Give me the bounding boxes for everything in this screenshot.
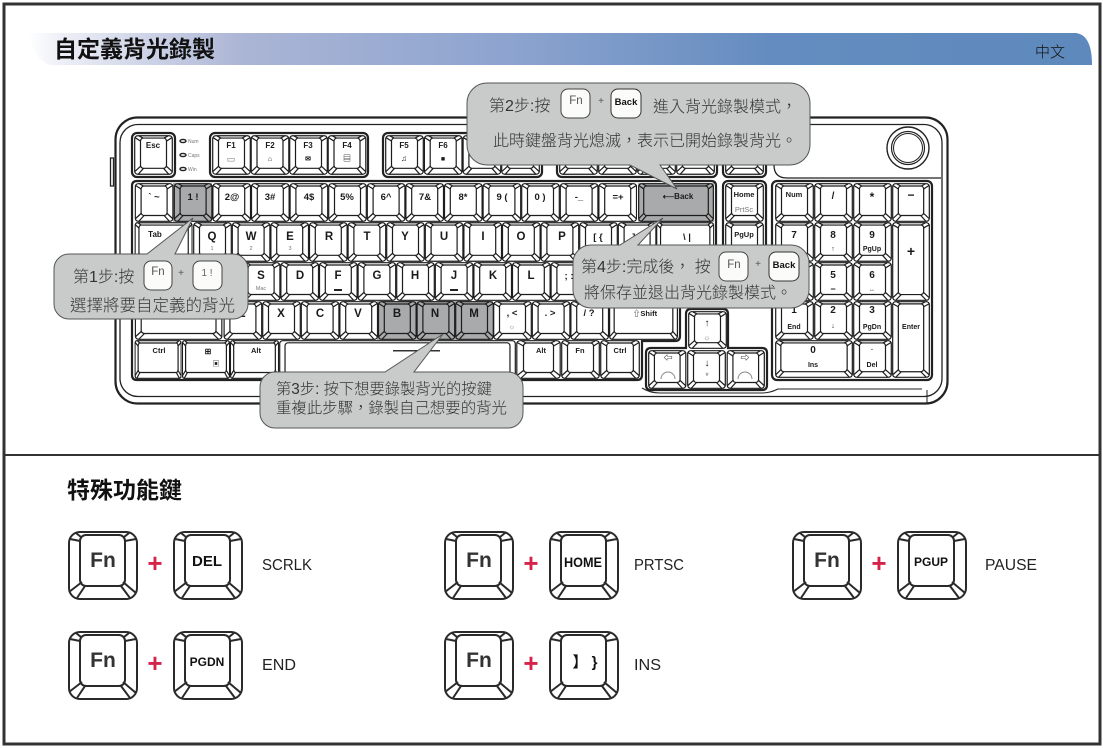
shortcut: Fn + HOME = PRTSC: PRTSC [634,557,684,574]
key group outlines [132,133,932,390]
shortcut: Fn + PGUP = PAUSE: PGUP [914,555,948,569]
keycap: Fn [561,89,590,118]
key legends: F1 [226,141,236,150]
callout: step 4: + [755,259,761,270]
key legends: ♫ [401,154,407,163]
letter legends: ▣ [212,360,220,368]
navigation keys [726,184,763,300]
navigation and arrow legends: * [705,371,709,381]
shortcut: Fn + PGDN = END: + [147,648,163,678]
letter legends: ⊞ [205,347,212,356]
keycap: Fn: Fn [569,95,583,107]
shortcut: Fn + DEL = SCRLK: Fn [90,549,116,572]
numeric keypad legends: 9 [869,230,875,241]
title: 自定義背光錄製 [54,36,215,62]
callout: step 3 [260,334,523,428]
numeric keypad legends: PgUp [863,246,881,253]
callout: step 1: + [178,268,184,279]
key legends [146,141,757,165]
letter legends: S [257,270,265,282]
shortcut: Fn + HOME = PRTSC: Fn [466,549,492,572]
shortcut: Fn + HOME = PRTSC: + [523,548,539,578]
number row legends: 8* [459,192,468,203]
navigation and arrow legends: ☼ [704,333,710,342]
number row legends: -_ [575,192,584,203]
keycap: Back [769,252,799,281]
callout: step 2: + [598,96,604,107]
numeric keypad legends: − [907,188,915,202]
number row legends: 2@ [225,192,239,203]
keycap: Fn: Fn [151,266,165,278]
shortcut: Fn + PGDN = END [69,632,296,699]
letter legends: Tab [148,230,162,239]
home row keys [135,263,713,300]
language label: 中文 [1035,44,1065,61]
arrow keys [649,312,764,388]
QWERTY row keys [135,223,714,261]
knob [887,127,929,169]
keycap: Back: Back [773,260,796,271]
letter legends [148,230,691,368]
letter legends: F [334,270,342,282]
keycap: Back [611,89,641,118]
letter legends: ; : [565,271,573,282]
shortcut: Fn + PGUP = PAUSE: PAUSE [985,557,1037,574]
letter legends: 2 [249,246,253,252]
letter legends: N [431,308,439,320]
shortcut: Fn + DEL = SCRLK: SCRLK [262,557,312,574]
key legends: ◀+ [690,156,700,163]
letter legends: R [325,231,334,243]
letter legends: Ctrl [153,346,165,355]
letter legends: G [373,270,382,282]
number row legends: ` ~ [148,192,160,203]
key legends: ◀◀ [477,156,489,163]
callout: step 3: 重複此步驟，錄製自己想要的背光 [276,399,507,417]
key legends: F6 [438,141,448,150]
key legends: F4 [342,141,352,150]
letter legends: Ctrl [614,346,626,355]
key legends: ▤ [343,154,351,163]
numeric keypad legends: Del [867,362,877,369]
callout: step 2: 此時鍵盤背光熄滅，表示已開始錄製背光。 [493,132,797,150]
letter legends: K [489,270,498,282]
letter legends: C [316,308,324,320]
number row legends: 4$ [304,192,315,203]
letter legends: , < [507,308,518,319]
key legends: F3 [303,141,313,150]
numeric keypad legends: ↔ [869,287,875,293]
status LEDs: Caps [188,153,200,159]
callout: step 4: 第4步:完成後， 按 [581,258,711,276]
key legends: ▶▶ [574,156,586,163]
highlighted key shading [173,183,714,340]
divider [4,454,1100,456]
key legends: ▭ [227,154,235,164]
shortcut: Fn + PGDN = END: PGDN [190,655,224,669]
keyboard case [110,118,948,404]
shortcut: Fn + PGUP = PAUSE: Fn [814,549,840,572]
number row legends: 1 ! [187,192,199,203]
number row legends: =+ [612,192,624,203]
shortcut: Fn + 】} = INS [445,632,661,699]
keycap: 1 [193,261,222,290]
key legends: F5 [399,141,409,150]
key legends: ⌂ [268,156,272,163]
letter legends: X [277,308,285,320]
function row keys [135,136,763,174]
navigation and arrow legends: ⇦ [663,353,673,363]
number row legends: 7& [419,192,431,203]
keycap: 1: 1 ! [201,268,213,279]
numeric keypad legends: Num [786,190,803,199]
shortcut: Fn + PGDN = END: Fn [90,649,116,672]
numeric keypad legends: Enter [902,324,920,331]
letter legends: 3 [288,246,292,252]
keycap: Fn [144,261,172,290]
letter legends: E [286,231,294,243]
navigation and arrow legends: ⇨ [740,353,750,363]
letter legends: ⇧Shift [633,308,658,318]
key legends: Esc [146,141,161,150]
numeric keypad keys [776,184,929,378]
shortcut: Fn + 】} = INS: Fn [466,649,492,672]
key legends: F2 [265,141,275,150]
letter legends: B [393,308,401,320]
status LEDs [180,139,200,173]
number row legends [148,192,694,203]
callout: step 1 [54,218,248,319]
letter legends: Alt [251,346,262,355]
letter legends: ] } [632,232,642,243]
keyboard illustration [110,118,948,404]
keycap: Fn: Fn [727,259,741,271]
callout: step 2: 進入背光錄製模式， [653,98,797,116]
navigation and arrow legends: ↑ [704,318,710,329]
letter legends: U [440,231,448,243]
key legends: ■ [441,156,445,163]
numeric keypad legends: 1 [791,305,797,316]
letter legends: L [527,270,535,282]
letter legends: P [558,231,566,243]
header banner [28,33,1092,65]
shortcut: Fn + PGDN = END: END [262,657,296,674]
numeric keypad legends [786,188,920,369]
navigation and arrow legends: PgUp [734,230,754,239]
key legends: ✉ [305,156,311,163]
numeric keypad legends: 2 [830,305,836,316]
number row legends: 5% [340,192,354,203]
numeric keypad legends: ↑ [831,246,835,253]
callout: step 1: 第1步:按 [73,268,134,286]
numeric keypad legends: Ins [808,362,818,369]
callout: step 4: 將保存並退出背光錄製模式。 [584,284,792,302]
number row legends: 6^ [381,192,392,203]
shortcut: Fn + HOME = PRTSC: HOME [564,554,602,570]
letter legends: . > [545,308,556,319]
number row legends: ⟵Back [663,192,694,201]
numeric keypad legends: 7 [791,230,797,241]
letter legends: 1 [210,246,214,252]
navigation and arrow legends [661,190,754,381]
shortcut: Fn + PGUP = PAUSE: + [871,548,887,578]
numeric keypad legends: 8 [830,230,836,241]
letter legends: / ? [583,308,595,319]
number row legends: 9 ( [496,192,508,203]
numeric keypad legends: 5 [830,270,836,281]
shortcut: Fn + 】} = INS: INS [634,657,661,674]
keycap: Fn [719,252,748,281]
letter legends: \ | [683,232,691,243]
shortcut: Fn + HOME = PRTSC [445,532,684,599]
letter legends: Y [401,231,409,243]
numeric keypad legends: − [830,284,836,294]
letter legends: D [296,270,304,282]
letter legends: Fn [575,346,585,355]
shortcut: Fn + 】} = INS: + [523,648,539,678]
numeric keypad legends: 0 [810,345,816,356]
letter legends: J [451,270,457,282]
bottom row keys [135,341,639,378]
letter legends: Q [208,231,217,243]
shortcut: Fn + 】} = INS: 】 } [572,654,598,671]
callout: step 2 [467,83,810,189]
letter legends: Mac [256,286,266,292]
callout: step 2: 第2步:按 [489,97,550,115]
navigation and arrow legends: ↓ [704,358,710,369]
numeric keypad legends: 6 [869,270,875,281]
shortcut: Fn + DEL = SCRLK: DEL [192,553,222,570]
letter legends: I [481,231,485,243]
numeric keypad legends: 3 [869,305,875,316]
numeric keypad legends: + [907,243,915,259]
letter legends: W [246,231,257,243]
letter legends: T [363,231,371,243]
shortcut: Fn + DEL = SCRLK [69,532,312,599]
callout: step 1: 選擇將要自定義的背光 [70,296,235,315]
shift row keys [135,302,677,340]
status LEDs: Num [188,139,199,145]
navigation and arrow legends: PrtSc [735,205,753,214]
letter legends: Z [238,308,246,320]
numeric keypad legends: * [870,190,875,204]
letter legends: H [411,270,419,282]
key legends: ◀ [615,156,621,163]
letter legends: Alt [536,346,546,355]
number row legends: 3# [265,192,276,203]
letter legends: ☼ [509,324,515,331]
numeric keypad legends: / [832,191,835,202]
callout: step 3: 第3步: 按下想要錄製背光的按鍵 [276,381,492,398]
section heading: 特殊功能鍵 [67,477,182,503]
callout: step 4 [573,218,809,308]
numeric keypad legends: ↓ [831,323,835,330]
numeric keypad legends: PgDn [863,324,881,331]
navigation and arrow legends: Home [734,190,754,199]
letter legends: V [354,308,362,320]
numeric keypad legends: . [871,345,873,352]
shortcut: Fn + DEL = SCRLK: + [147,548,163,578]
letter legends: M [469,308,479,320]
shortcut: Fn + PGUP = PAUSE [793,532,1037,599]
letter legends: O [517,231,526,243]
status LEDs: Win [188,167,197,173]
numeric keypad legends: End [787,324,801,331]
letter legends: [ { [593,232,603,243]
keycap: Back: Back [615,97,638,108]
key legends: ScrLK [734,156,757,165]
key legends: ▶❙ [514,155,526,162]
number row keys [135,184,713,222]
number row legends: 0 ) [534,192,546,203]
